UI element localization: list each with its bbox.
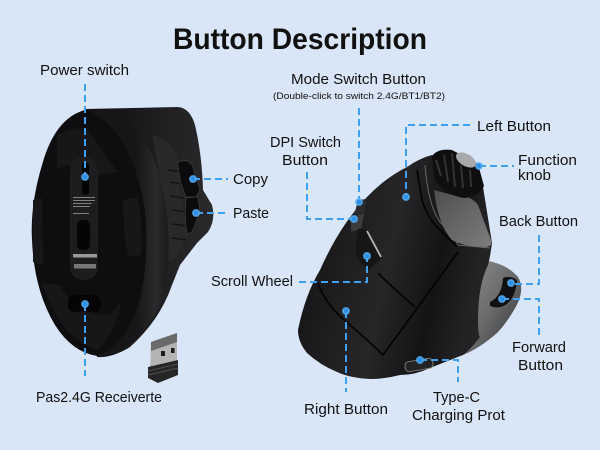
leader: mode switch (356, 108, 362, 205)
label: mode switch button: Mode Switch Button (291, 72, 426, 88)
main body (298, 155, 492, 379)
label: forward button: Button (518, 358, 563, 374)
power switch slot (82, 163, 89, 195)
label: type-c charging port: Type-C (433, 390, 480, 406)
label: back button: Back Button (499, 214, 578, 230)
leader: function knob (476, 163, 514, 169)
leader: forward button (499, 296, 539, 335)
USB receiver (148, 333, 178, 383)
base plate (32, 110, 146, 356)
knob ridges (436, 153, 471, 188)
side ridge lines (168, 170, 187, 240)
receiver base (148, 360, 178, 383)
copy side button (178, 161, 200, 197)
label: power switch: Power switch (40, 63, 129, 79)
plug opening (151, 333, 177, 351)
left mouse: underside view (32, 107, 213, 357)
leader: power switch (82, 84, 88, 180)
panel scroll slot (77, 220, 90, 250)
base stripes (148, 364, 178, 375)
right mouse: front view (298, 149, 521, 379)
label: mode switch note: (Double-click to switch 2.4G/BT1/BT2) (273, 91, 445, 102)
label: function knob: knob (518, 168, 551, 184)
forward and back buttons (490, 277, 517, 307)
certification marks (74, 264, 96, 268)
knob top (453, 149, 479, 171)
label: type-c charging port: Charging Prot (412, 408, 505, 424)
brand strip (73, 254, 97, 258)
label: paste: Paste (233, 206, 269, 222)
mode switch button (353, 199, 367, 220)
label: receiver: Pas2.4G Receiverte (36, 390, 162, 406)
leader: left button (403, 125, 470, 200)
paste side button (185, 197, 200, 234)
leader: type-c (417, 357, 458, 382)
thumb wing (463, 260, 521, 355)
label: dpi switch button: DPI Switch (270, 135, 341, 151)
label: left button: Left Button (477, 119, 551, 135)
leader: receiver (82, 301, 88, 376)
label: function knob: Function (518, 153, 577, 169)
top panel (434, 190, 491, 247)
scroll wheel highlight (367, 231, 381, 257)
panel fine print (73, 197, 95, 214)
leader: right button (343, 308, 349, 392)
mouse side shell (85, 107, 213, 357)
label: forward button: Forward (512, 340, 566, 356)
leader: scroll wheel (299, 253, 370, 282)
title: Button Description (173, 23, 427, 56)
side grip ridges (152, 135, 188, 262)
label: right button: Right Button (304, 402, 388, 418)
panel rim (425, 165, 490, 248)
leader: dpi switch (307, 172, 357, 222)
function knob (432, 149, 484, 198)
knob base (432, 150, 484, 198)
plug holes (161, 348, 174, 356)
scroll wheel (355, 228, 382, 270)
receiver slot (68, 295, 101, 312)
label: scroll wheel: Scroll Wheel (211, 274, 293, 290)
leader: back button (508, 235, 539, 286)
type-c port (404, 358, 434, 372)
label: copy: Copy (233, 172, 269, 188)
foot pads (33, 128, 142, 350)
button seams (318, 170, 458, 355)
leader: paste (193, 210, 228, 216)
outer rim (85, 109, 168, 357)
receiver metal plug (150, 333, 177, 375)
leader: copy (190, 176, 228, 182)
battery panel (70, 157, 98, 280)
label: dpi switch button: Button (282, 153, 328, 169)
dpi switch button (351, 214, 364, 232)
